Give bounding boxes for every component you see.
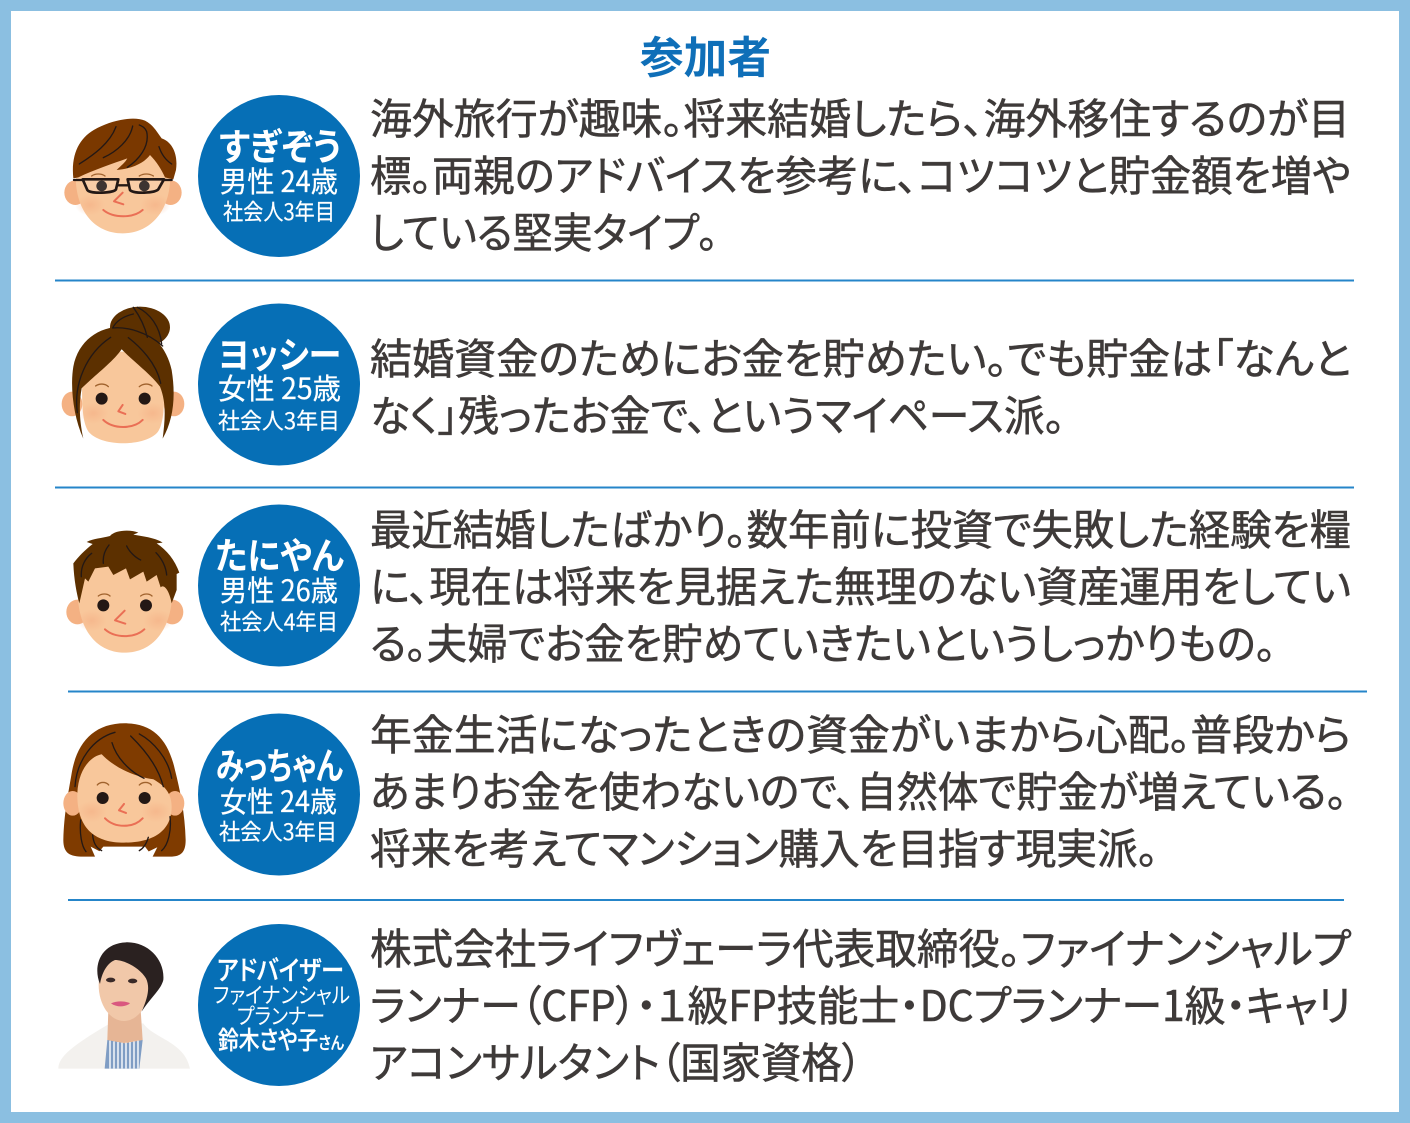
badge: Taniyan: たにやん: [215, 526, 344, 580]
text block: Taniyan description: る。夫婦でお金を貯めていきたいというしっかりもの。: [370, 611, 1276, 672]
badge: Taniyan: [198, 504, 360, 666]
text block: Taniyan description: に、現在は将来を見据えた無理のない資産運用をしてい: [370, 554, 1351, 615]
icon: adviser portrait: [58, 942, 190, 1069]
badge: Micchan: [198, 714, 360, 876]
badge: Sugizo: すぎぞう: [219, 117, 341, 171]
badge: Micchan: みっちゃん: [216, 736, 343, 790]
badge: adviser: ファイナンシャル: [213, 978, 350, 1010]
icon: woman with long hair: [63, 723, 186, 857]
panel: adviser: [58, 916, 1352, 1091]
text block: adviser description: [370, 916, 1352, 1091]
title: 参加者: [640, 22, 771, 86]
panel: participant Yosshi: [62, 304, 1351, 466]
text block: adviser description: 株式会社ライフヴェーラ代表取締役。ファイナンシャルプ: [370, 916, 1352, 977]
badge: Micchan: 女性 24歳: [220, 779, 337, 821]
badge: Yosshi: [198, 304, 360, 466]
panel: participant Taniyan: [66, 497, 1351, 672]
icon: man with glasses: [64, 119, 182, 233]
text block: Taniyan description: 最近結婚したばかり。数年前に投資で失敗した経験を糧: [370, 497, 1351, 558]
text block: Micchan description: 将来を考えてマンション購入を目指す現実派。: [370, 816, 1158, 877]
icon: woman with hair bun: [62, 307, 184, 443]
text block: Micchan description: 年金生活になったときの資金がいまから心配。普段から: [370, 702, 1351, 763]
text block: adviser description: ランナー（CFP）・１級FP技能士・DCプランナー1級・キャリ: [370, 973, 1351, 1034]
text block: Sugizo description: [370, 86, 1351, 261]
badge: Taniyan: 男性 26歳: [220, 568, 338, 610]
panel: participant Micchan: [63, 702, 1351, 877]
badge: adviser: アドバイザー: [217, 949, 344, 988]
badge: Micchan: 社会人3年目: [219, 815, 337, 847]
badge: Sugizo: [198, 95, 360, 257]
text block: Yosshi description: 結婚資金のためにお金を貯めたい。でも貯金は「なんと: [370, 326, 1351, 387]
badge: adviser: 鈴木さや子さん: [218, 1021, 345, 1057]
text block: Micchan description: [370, 702, 1351, 877]
badge: Yosshi: 社会人3年目: [218, 404, 340, 436]
text block: Taniyan description: [370, 497, 1351, 672]
text block: Micchan description: あまりお金を使わないので、自然体で貯金が増えている。: [370, 759, 1347, 820]
badge: Yosshi: 女性 25歳: [218, 366, 341, 408]
badge: adviser: プランナー: [237, 999, 325, 1031]
text block: Sugizo description: している堅実タイプ。: [370, 200, 718, 261]
badge: adviser: [198, 924, 360, 1086]
icon: man with short spiky hair: [66, 531, 183, 653]
badge: Sugizo: 社会人3年目: [223, 195, 335, 227]
text block: Yosshi description: なく」残ったお金で、というマイペース派。: [370, 383, 1065, 444]
text block: Yosshi description: [370, 326, 1351, 444]
panel: participant Sugizo: [64, 86, 1351, 261]
badge: Taniyan: 社会人4年目: [220, 605, 338, 637]
text block: Sugizo description: 海外旅行が趣味。将来結婚したら、海外移住するのが目: [370, 86, 1350, 147]
badge: Sugizo: 男性 24歳: [220, 159, 338, 201]
badge: Yosshi: ヨッシー: [218, 325, 341, 379]
text block: Sugizo description: 標。両親のアドバイスを参考に、コツコツと貯金額を増や: [370, 143, 1351, 204]
text block: adviser description: アコンサルタント（国家資格）: [370, 1030, 862, 1091]
